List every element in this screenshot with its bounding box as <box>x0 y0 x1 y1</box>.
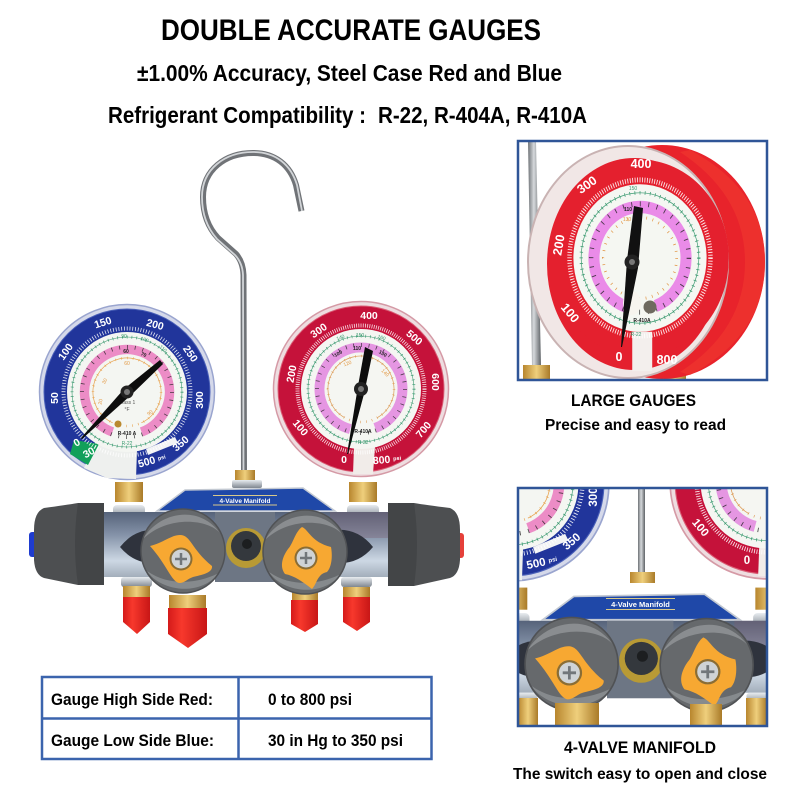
inset gauge numbers: 400 <box>631 157 651 171</box>
table row: high side: Gauge High Side Red: <box>51 691 213 709</box>
red gauge scale numbers <box>285 310 441 467</box>
specification table <box>42 677 432 759</box>
blue gauge inner labels: Class 1 <box>119 400 136 406</box>
blue gauge inner labels: °F <box>124 407 130 413</box>
table row: low side: 30 in Hg to 350 psi <box>268 732 403 750</box>
red gauge scale numbers: 800 psi <box>372 453 402 467</box>
blue gauge scale numbers: 200 <box>145 317 165 333</box>
blue gauge scale numbers: 0 <box>71 436 83 450</box>
inset gauge numbers <box>550 157 677 367</box>
inset gauge numbers: 200 <box>550 233 568 256</box>
inset panel: 4-valve manifold <box>516 486 768 728</box>
red gauge inner labels: 160 <box>376 334 386 342</box>
brass rod nut <box>232 470 262 488</box>
blue gauge inner labels: 90 <box>121 334 127 340</box>
caption: 4-valve manifold <box>513 739 767 783</box>
red high side gauge <box>274 302 448 476</box>
red gauge scale numbers: 700 <box>414 419 434 441</box>
blue gauge scale numbers <box>49 315 206 470</box>
inset gauge labels: 150 <box>629 186 637 192</box>
red gauge inner labels: 100 <box>333 349 344 359</box>
red gauge scale numbers: 500 <box>403 328 425 348</box>
blue gauge scale numbers: 50 <box>49 392 61 404</box>
subtitle: refrigerant compatibility <box>108 102 587 128</box>
blue gauge inner labels: 30 <box>101 377 109 385</box>
manifold plate label: 4-Valve Manifold <box>220 498 270 505</box>
caption: large gauges <box>545 392 726 434</box>
gauge glass <box>528 146 728 378</box>
inset plate label <box>606 598 675 610</box>
inset red gauge <box>670 489 766 580</box>
red gauge scale numbers: 100 <box>290 417 310 439</box>
red gauge scale numbers: 0 <box>341 454 347 466</box>
blue gauge inner labels: 110 <box>158 344 168 354</box>
inset gauge numbers: 100 <box>558 301 582 326</box>
inset gauge numbers <box>526 487 750 572</box>
red gauge inner labels: R-410A <box>354 429 372 435</box>
inset blue gauge <box>519 489 610 582</box>
title: DOUBLE ACCURATE GAUGES <box>161 14 541 47</box>
blue gauge scale numbers: 250 <box>180 343 200 365</box>
blue gauge scale numbers: 100 <box>56 341 76 363</box>
inset gauge labels: R-410A <box>633 318 651 324</box>
inset gauge numbers: 300 <box>588 487 600 507</box>
blue gauge needle <box>81 360 163 439</box>
inset gauge numbers: 500 psi <box>526 554 559 572</box>
inset gauge labels: R-22 <box>631 332 642 338</box>
red gauge case <box>644 145 765 379</box>
hook rod <box>202 152 302 472</box>
blue gauge inner labels: R-410 A <box>118 431 137 437</box>
blue gauge scale numbers: 30 <box>81 445 97 461</box>
blue gauge inner labels: 100 <box>139 336 149 344</box>
red gauge scale numbers: 200 <box>285 364 299 384</box>
inset gauge numbers: 0 <box>744 555 750 567</box>
subtitle: accuracy: ±1.00% Accuracy, Steel Case Red and Blue <box>137 60 562 86</box>
red gauge inner labels: 140 <box>380 368 390 379</box>
magnified dial <box>551 160 729 371</box>
table row: high side: 0 to 800 psi <box>268 691 352 709</box>
caption: 4-valve manifold: The switch easy to open and close <box>513 766 767 783</box>
red gauge inner labels: 120 <box>343 360 353 368</box>
inset gauge numbers: 800 <box>657 353 677 367</box>
inset gauge labels <box>623 186 651 338</box>
caption: large gauges: LARGE GAUGES <box>571 392 696 410</box>
blue gauge inner labels: 70 <box>140 351 147 359</box>
blue gauge scale numbers: 500 psi <box>137 451 168 470</box>
blue gauge inner labels: 60 <box>124 361 130 367</box>
inset plate label: 4-Valve Manifold <box>611 600 670 609</box>
caption: 4-valve manifold: 4-VALVE MANIFOLD <box>564 739 716 757</box>
blue gauge scale numbers: 350 <box>170 434 192 454</box>
zero-adjust screw <box>644 300 656 314</box>
blue gauge inner labels: 20 <box>98 398 104 405</box>
pointer reflection <box>623 296 640 314</box>
red gauge needle <box>347 347 373 454</box>
red gauge inner labels: 110 <box>353 346 361 352</box>
red gauge inner labels <box>333 333 390 446</box>
subtitle: refrigerant compatibility: Refrigerant Compatibility : <box>108 102 366 128</box>
red gauge scale numbers: 300 <box>308 321 330 341</box>
inset panel: large gauges <box>518 141 768 380</box>
inset gauge labels: 130 <box>623 217 631 223</box>
blue gauge inner labels: 90 <box>146 409 155 417</box>
blue gauge scale numbers: 150 <box>93 315 113 331</box>
manifold plate label <box>213 496 277 505</box>
subtitle: refrigerant compatibility: R-22, R-404A, R-410A <box>378 102 587 128</box>
inset manifold <box>519 588 766 710</box>
table row: low side <box>51 732 403 750</box>
red gauge inner labels: 150 <box>356 333 364 339</box>
red gauge inner labels: R-22 <box>358 440 369 446</box>
blue low side gauge <box>40 304 214 480</box>
manifold body with valves <box>29 482 464 648</box>
inset gauge numbers: 350 <box>561 531 583 553</box>
blue gauge scale numbers: 300 <box>194 391 206 409</box>
inset needle <box>621 206 643 347</box>
inset gauge numbers: 100 <box>689 517 711 539</box>
red gauge scale numbers: 600 <box>429 373 441 391</box>
inset gauge numbers: 0 <box>616 350 623 364</box>
blue gauge inner labels <box>98 334 168 447</box>
inset brass fittings <box>518 698 767 726</box>
blue gauge inner labels: 60 <box>123 349 129 355</box>
inset gauge numbers: 300 <box>574 173 600 197</box>
inset rod <box>638 488 645 573</box>
red gauge inner labels: 130 <box>377 349 388 359</box>
red gauge scale numbers: 400 <box>360 310 378 322</box>
inset gauge labels: 110 <box>624 207 632 213</box>
table row: high side <box>51 691 352 709</box>
red gauge inner labels: 140 <box>336 334 346 342</box>
caption: large gauges: Precise and easy to read <box>545 417 726 434</box>
table row: low side: Gauge Low Side Blue: <box>51 732 214 750</box>
background rod <box>528 141 541 366</box>
blue gauge inner labels: R-22 <box>122 441 133 447</box>
